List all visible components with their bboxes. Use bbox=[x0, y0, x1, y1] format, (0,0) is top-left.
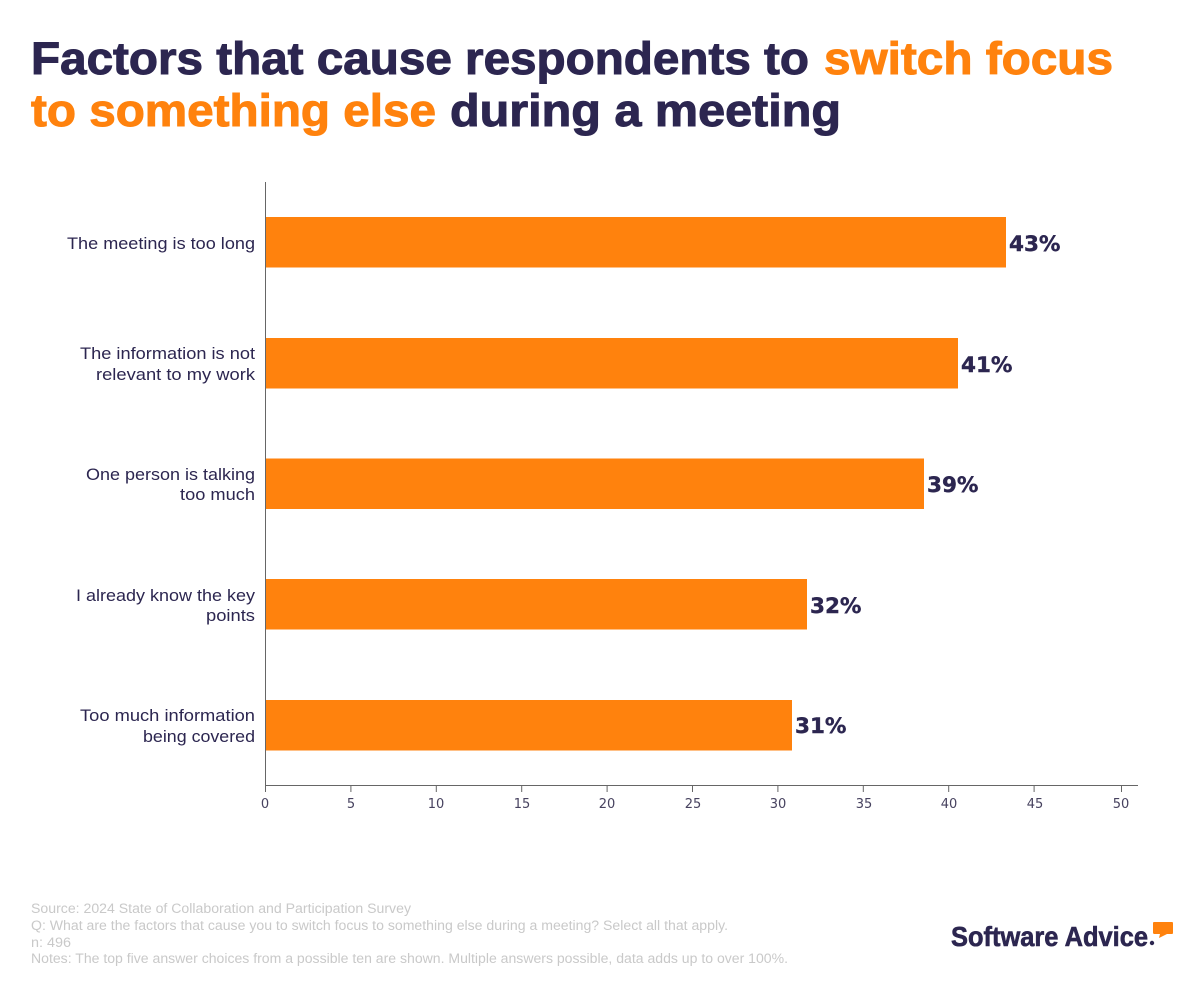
value labels: 31% bbox=[795, 714, 846, 739]
category labels: Too much information bbox=[80, 706, 255, 725]
x axis labels bbox=[261, 797, 1129, 812]
category labels: relevant to my work bbox=[96, 365, 256, 384]
source notes: Source: 2024 State of Collaboration and Participation Survey bbox=[31, 901, 411, 916]
source notes: Notes: The top five answer choices from a possible ten are shown. Multiple answers possible, data adds up to over 100%. bbox=[31, 951, 788, 966]
value labels: 32% bbox=[810, 594, 861, 619]
x axis labels: 0 bbox=[261, 797, 269, 812]
category labels: The meeting is too long bbox=[67, 234, 255, 253]
value labels bbox=[795, 232, 1060, 739]
source notes: n: 496 bbox=[31, 935, 71, 950]
x axis labels: 45 bbox=[1027, 797, 1043, 812]
source notes: Q: What are the factors that cause you to switch focus to something else during a meeting? Select all that apply. bbox=[31, 918, 728, 933]
category labels bbox=[67, 234, 256, 746]
x axis labels: 50 bbox=[1113, 797, 1129, 812]
bar chart bbox=[67, 182, 1138, 812]
x axis labels: 30 bbox=[770, 797, 786, 812]
title: during a meeting bbox=[450, 85, 841, 136]
axes bbox=[265, 182, 1138, 792]
title bbox=[31, 33, 1113, 136]
category labels: The information is not bbox=[80, 344, 255, 363]
x axis labels: 5 bbox=[347, 797, 355, 812]
title: Factors that cause respondents to bbox=[31, 33, 809, 84]
value labels: 39% bbox=[927, 473, 978, 498]
x axis labels: 35 bbox=[856, 797, 872, 812]
value labels: 43% bbox=[1009, 232, 1060, 257]
value labels: 41% bbox=[961, 353, 1012, 378]
bars bbox=[266, 217, 1006, 750]
category labels: too much bbox=[180, 485, 255, 504]
x axis labels: 20 bbox=[599, 797, 615, 812]
source notes bbox=[31, 901, 788, 966]
category labels: being covered bbox=[143, 727, 255, 746]
x axis labels: 25 bbox=[685, 797, 701, 812]
title: switch focus bbox=[824, 33, 1113, 84]
x axis labels: 15 bbox=[514, 797, 530, 812]
icon: speech bubble bbox=[1153, 922, 1173, 938]
logo: Software Advice: Software Advice bbox=[951, 921, 1148, 952]
category labels: I already know the key bbox=[76, 586, 256, 605]
x axis labels: 10 bbox=[428, 797, 444, 812]
category labels: One person is talking bbox=[86, 465, 255, 484]
category labels: points bbox=[206, 606, 255, 625]
title: to something else bbox=[31, 85, 436, 136]
x axis labels: 40 bbox=[941, 797, 957, 812]
